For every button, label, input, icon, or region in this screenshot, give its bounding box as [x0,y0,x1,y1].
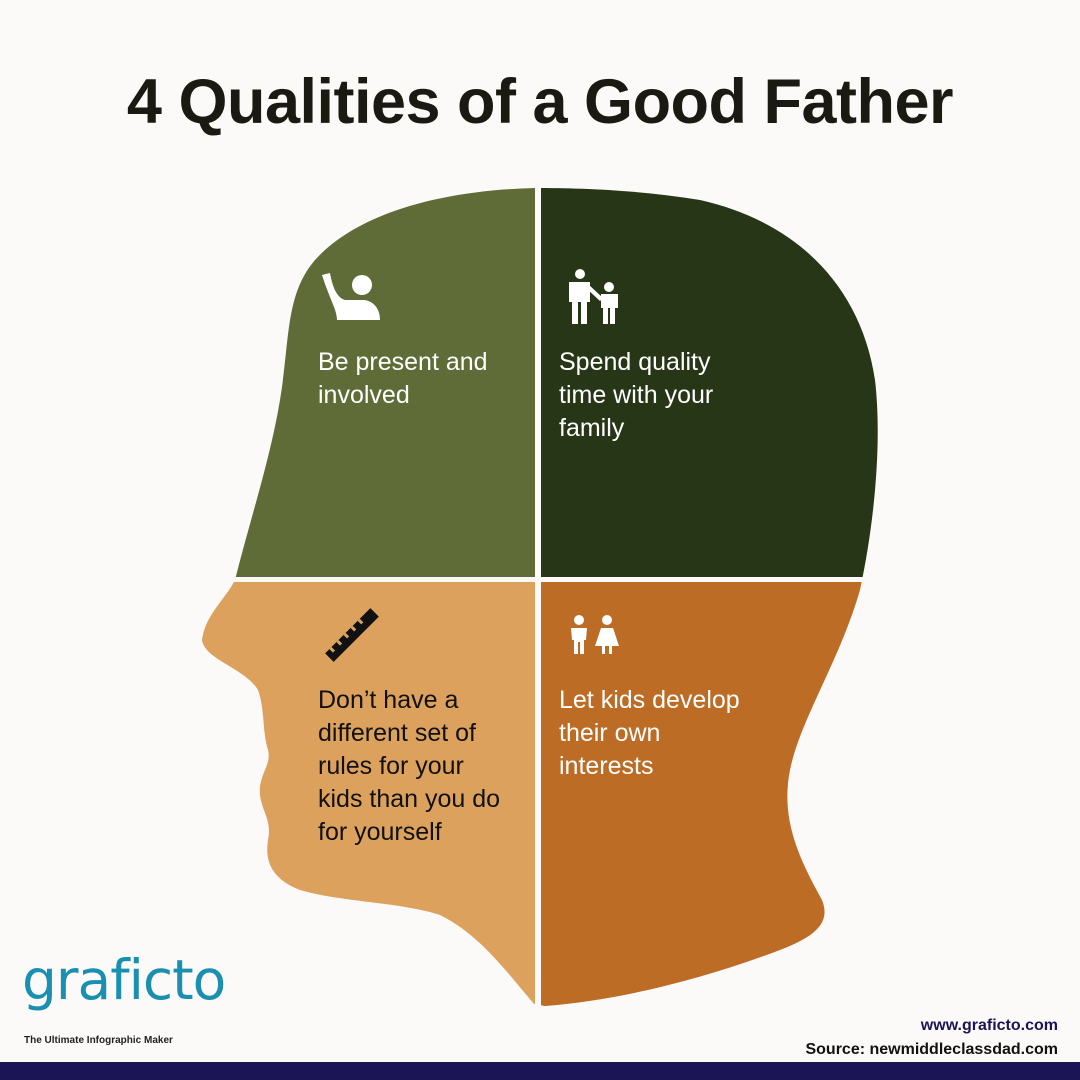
quadrant: quality time [541,188,878,577]
text: interests: Let kids develop [559,686,740,714]
text: present [318,348,488,409]
text: present: Be present and [318,348,488,376]
icon: two kids [571,615,619,654]
tagline: The Ultimate Infographic Maker [24,1035,173,1046]
text: rules: different set of [318,719,476,747]
quadrant: interests [541,582,862,1006]
text: quality time: time with your [559,381,713,409]
text: quality time: Spend quality [559,348,711,376]
title: 4 Qualities of a Good Father [127,67,953,137]
icon: raised hand [322,273,380,320]
text: quality time [559,348,713,442]
quadrant: rules [202,582,535,1004]
text: rules: kids than you do [318,785,500,813]
footer text [805,1017,1058,1058]
icon: parent and child [569,269,618,324]
text: quality time: family [559,414,624,442]
text: interests: their own [559,719,660,747]
text: present: involved [318,381,410,409]
text: rules: Don’t have a [318,686,458,714]
quadrant: present [236,188,535,577]
text: rules [318,686,500,846]
text: interests: interests [559,752,653,780]
footer text: www.graficto.com [921,1017,1058,1034]
footer text: Source: newmiddleclassdad.com [805,1041,1058,1058]
head chart [202,188,878,1006]
logo: graficto [22,948,225,1012]
icon: ruler [325,608,379,662]
footer bar [0,1062,1080,1080]
text: interests [559,686,740,780]
text: rules: rules for your [318,752,464,780]
text: rules: for yourself [318,818,442,846]
